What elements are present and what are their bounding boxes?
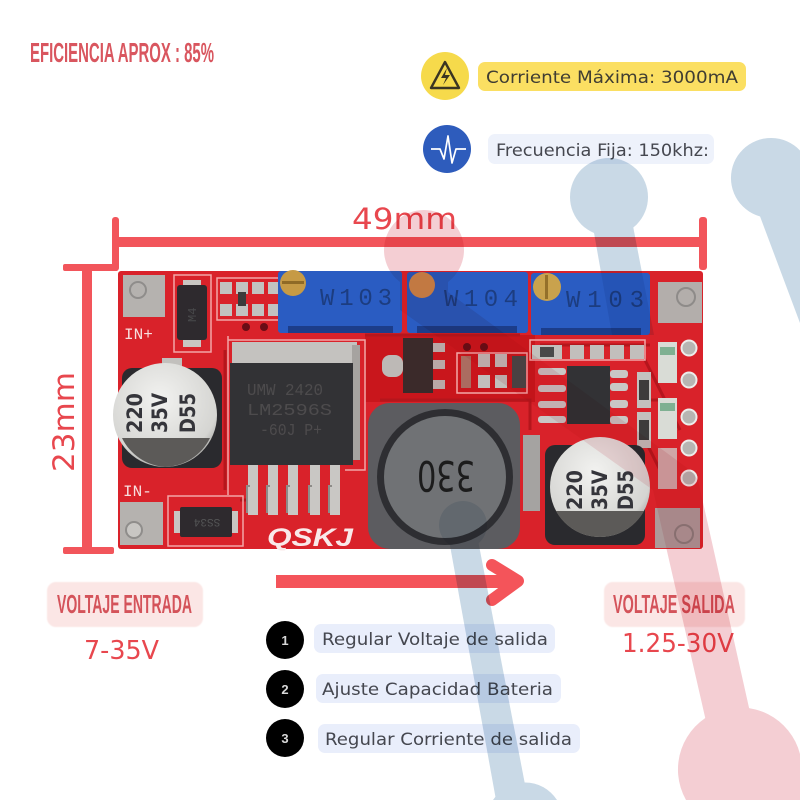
dimension: width 49mm <box>112 202 707 271</box>
left capacitor <box>113 358 222 468</box>
diode top <box>177 280 207 347</box>
op-amp chip <box>538 366 628 424</box>
background decoration: blue and pink pins <box>384 138 800 800</box>
legend item 2 <box>266 670 561 708</box>
trimmer W104 center <box>407 272 528 333</box>
SS34 diode: SS34 <box>193 515 220 527</box>
small pads top row <box>220 282 278 331</box>
trimmer W103 left <box>278 270 402 333</box>
small SMD parts middle <box>461 343 644 388</box>
output holes <box>682 340 696 486</box>
label: output voltage <box>604 582 745 627</box>
callout: max current: Corriente Máxima: 3000mA <box>486 68 739 87</box>
left capacitor: 220 <box>123 393 147 433</box>
LM2596 regulator: UMW 2420 <box>247 382 323 401</box>
status LEDs <box>658 342 677 489</box>
mounting pads <box>120 275 702 548</box>
arrow: current direction <box>276 565 518 600</box>
inductor 330: 330 <box>417 451 475 500</box>
SMD resistors right <box>637 372 651 448</box>
callout: fixed frequency: Frecuencia Fija: 150khz: <box>496 141 709 160</box>
dimension: height 23mm <box>47 264 118 554</box>
legend item 1: Regular Voltaje de salida <box>322 630 548 649</box>
trimmer W103 right <box>531 273 650 335</box>
legend item 3: Regular Corriente de salida <box>325 730 572 749</box>
value: input voltage range: 7-35V <box>84 636 159 666</box>
logo QSKJ: QSKJ <box>267 524 354 552</box>
diode top: M4 <box>186 308 200 322</box>
legend item 1 <box>266 621 555 659</box>
value: output voltage range: 1.25-30V <box>622 629 734 659</box>
icon: pulse frequency <box>423 125 471 173</box>
label: input voltage <box>47 582 203 627</box>
SS34 diode <box>174 507 238 537</box>
callout: max current <box>478 62 746 91</box>
trimmer W103 right: W103 <box>566 288 644 315</box>
dimension: height 23mm: 23mm <box>47 372 81 472</box>
icon: warning electric <box>421 52 469 100</box>
trimmer W103 left: W103 <box>320 286 392 313</box>
silkscreen IN+: IN+ <box>124 326 153 344</box>
right capacitor: 35V <box>588 469 612 510</box>
legend item 2: Ajuste Capacidad Bateria <box>322 680 553 699</box>
label: input voltage: VOLTAJE ENTRADA <box>57 589 192 619</box>
right capacitor <box>545 437 650 545</box>
pcb <box>118 271 703 549</box>
legend item 2: 2 <box>281 682 289 697</box>
left capacitor: 35V <box>148 392 172 433</box>
legend item 3: 3 <box>281 731 289 746</box>
legend item 3 <box>266 719 580 757</box>
small transistor <box>382 338 445 393</box>
inductor 330 <box>368 403 520 549</box>
trimmer W104 center: W104 <box>444 287 518 314</box>
LM2596 regulator: LM2596S <box>247 402 332 421</box>
dimension: width 49mm: 49mm <box>352 202 457 236</box>
legend item 1: 1 <box>281 633 289 648</box>
darker trace zone <box>365 335 535 402</box>
pcb traces <box>225 335 680 500</box>
title: efficiency: EFICIENCIA APROX : 85% <box>30 37 214 68</box>
board: LM2596 module photo <box>113 270 703 552</box>
LM2596 regulator: -60J P+ <box>260 422 322 441</box>
silver strip <box>523 435 540 511</box>
left capacitor: D55 <box>176 393 200 433</box>
callout: fixed frequency <box>488 134 714 164</box>
right capacitor: D55 <box>614 470 638 510</box>
right capacitor: 220 <box>563 470 587 510</box>
LM2596 regulator <box>230 342 360 515</box>
silkscreen IN-: IN- <box>123 483 152 501</box>
